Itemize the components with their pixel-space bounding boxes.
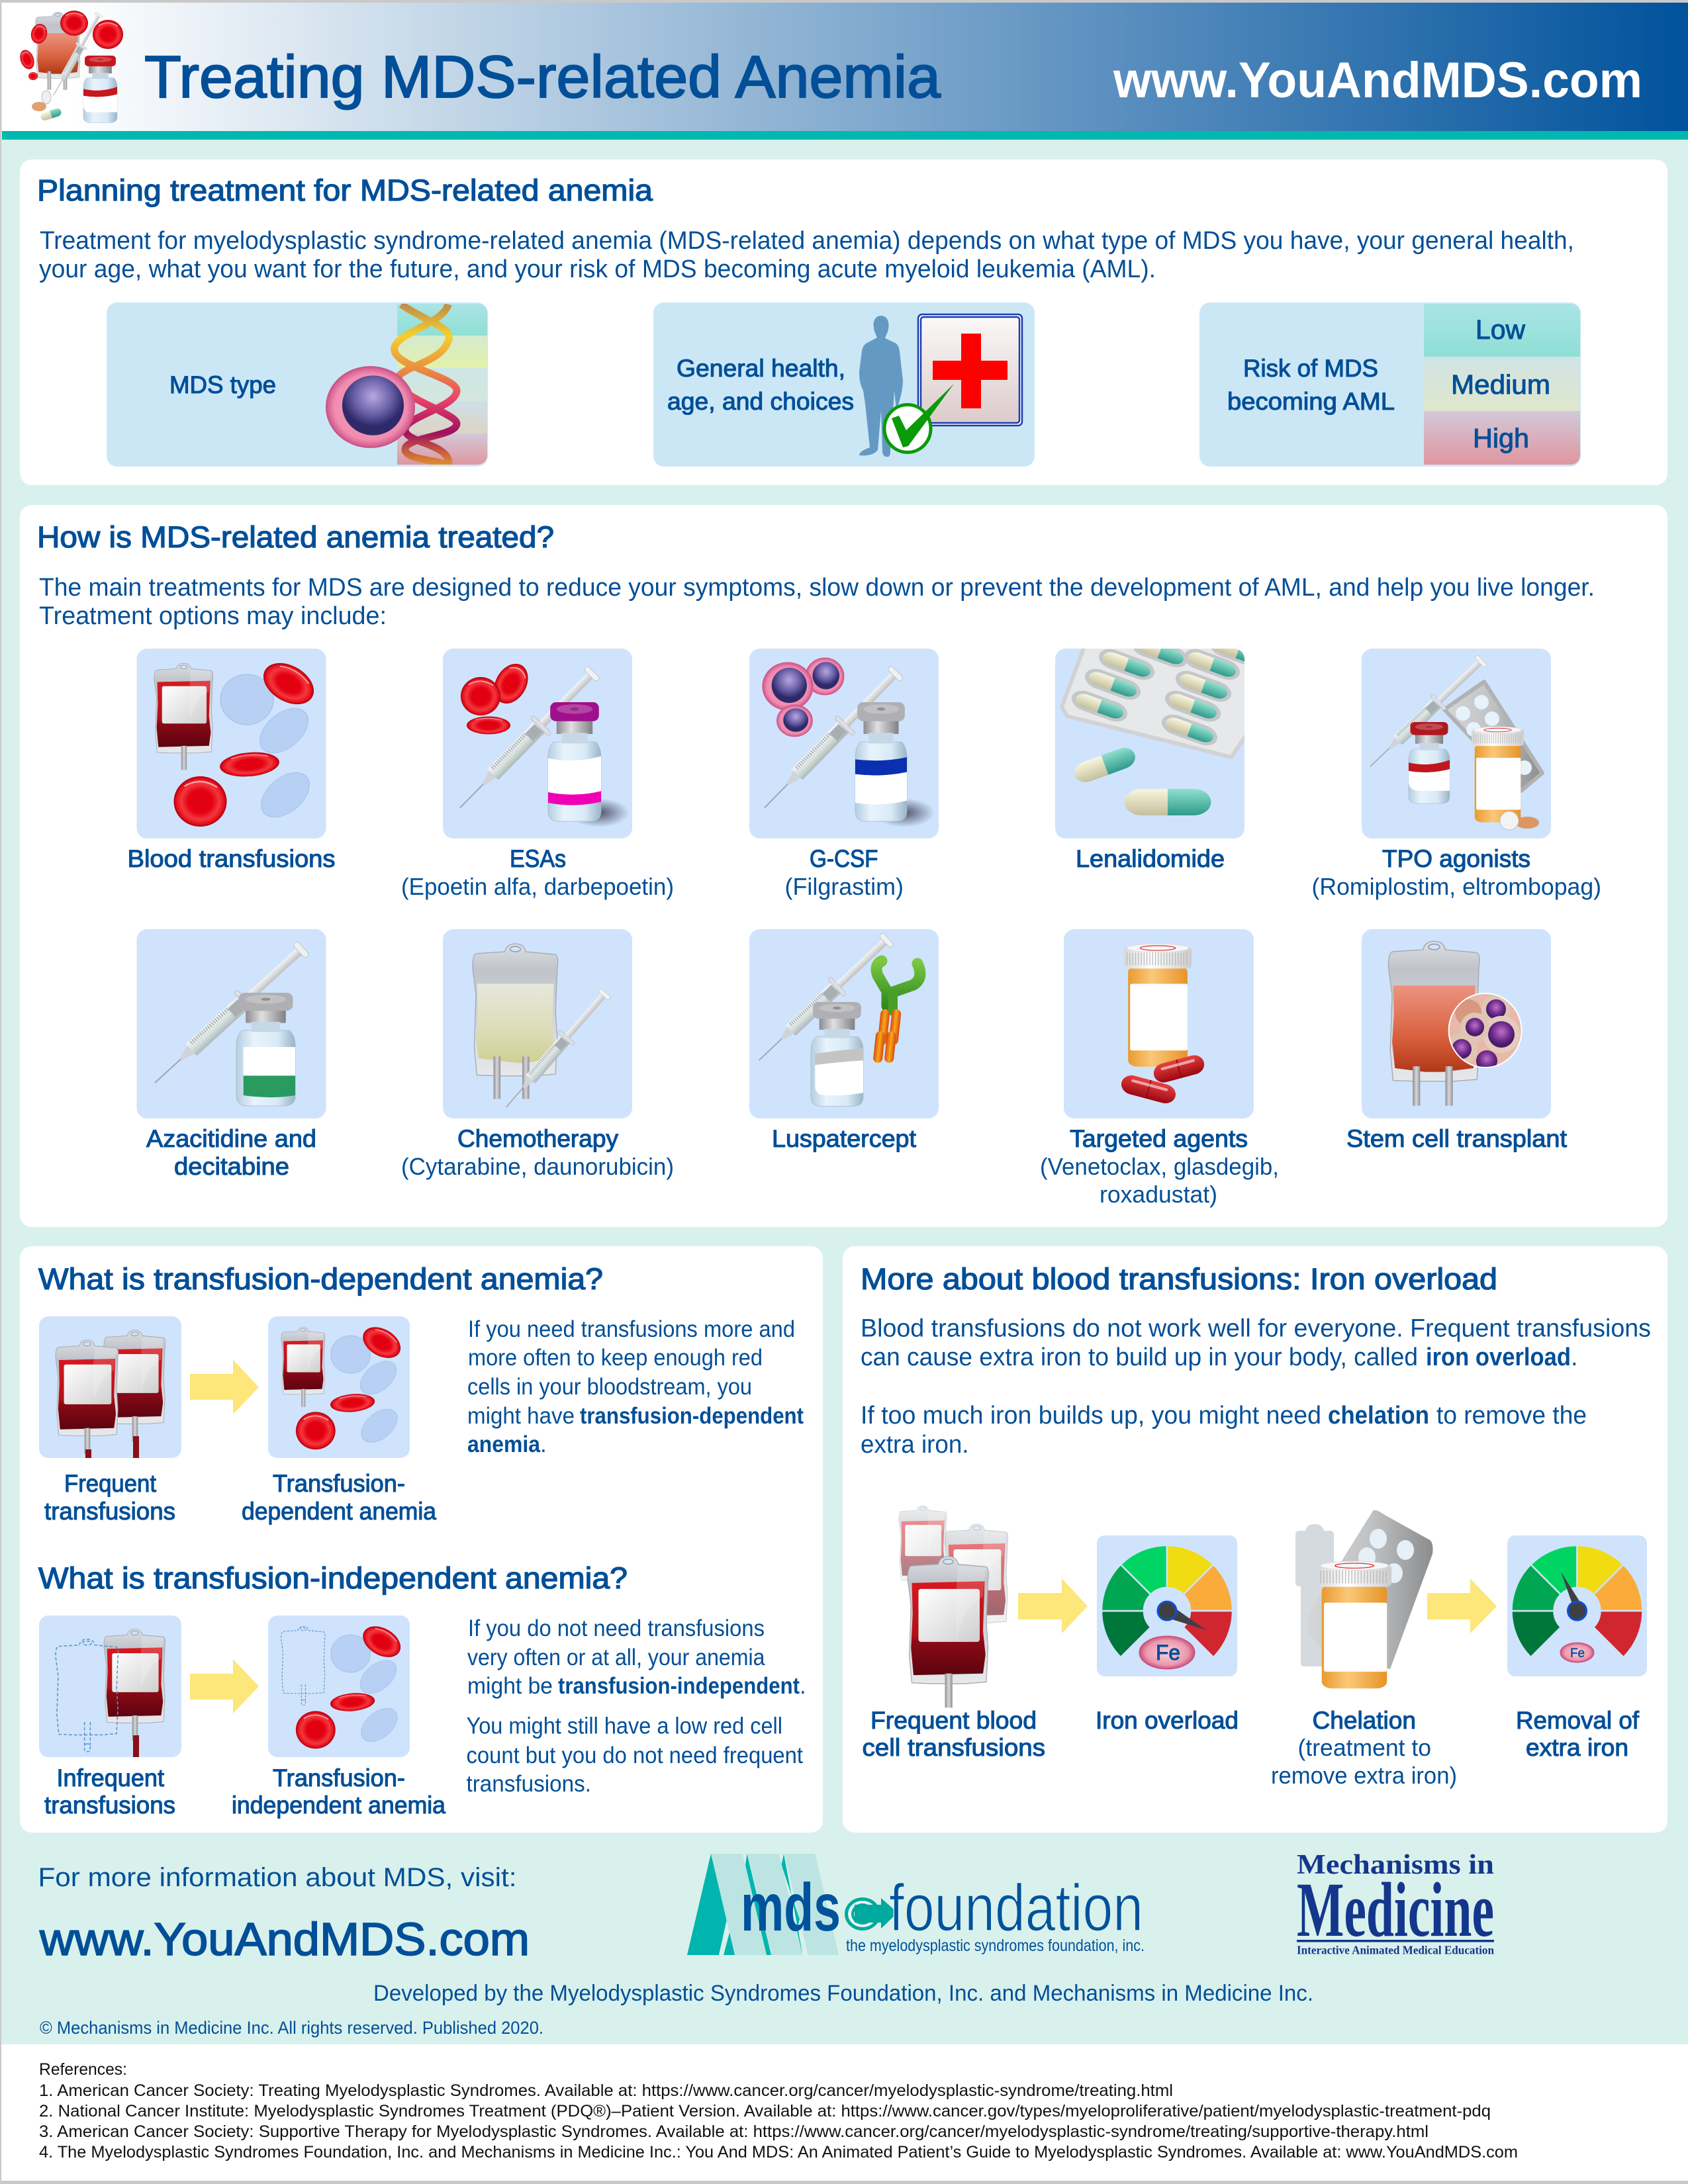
references: 4. The Myelodysplastic Syndromes Foundation, Inc. and Mechanisms in Medicine Inc.: You And MDS: An Animated Patient’s Guide to Myelodysplastic Syndromes. Available at: www.YouAndMDS.com [39,2143,1518,2161]
treatment: luspatercept [749,929,939,1152]
step: chelation: (treatment to [1297,1734,1431,1761]
treatment: azacitidine and decitabine [136,929,326,1180]
logo: Mechanisms in Medicine: Interactive Animated Medical Education [1297,1943,1494,1956]
text: transfusion-dependent explanation: If you need transfusions more and [468,1316,795,1342]
text: iron overload explanation: . [1571,1343,1578,1371]
label: Risk of MDS [1243,355,1378,382]
step: iron overload gauge: Iron overload [1096,1707,1239,1734]
panel: planning treatment [20,159,1667,485]
treatment: targeted agents: roxadustat) [1100,1181,1217,1208]
intro text [39,227,1574,283]
text: transfusion-independent explanation: count but you do not need frequent [466,1743,803,1768]
arrow [1427,1578,1497,1633]
website URL: www.YouAndMDS.com [1113,52,1642,109]
icon: medical cross sign [918,314,1022,426]
heading: transfusion-dependent: What is transfusion-dependent anemia? [38,1262,603,1296]
references: 2. National Cancer Institute: Myelodysplastic Syndromes Treatment (PDQ®)–Patient Version. Available at: https://www.cancer.gov/types/myeloproliferative/patient/myelodysplastic-treatment-pdq [39,2102,1491,2120]
box: MDS type [107,302,488,467]
text: transfusion-independent explanation: You might still have a low red cell [466,1713,782,1739]
icon: header treatment collage [17,11,123,122]
header banner [0,0,1688,140]
panel: how is anemia treated [20,505,1667,1227]
step: removal of extra iron gauge: extra iron [1526,1734,1628,1761]
text: iron overload explanation [861,1314,1651,1459]
step: frequent blood cell transfusions [862,1506,1045,1761]
text: iron overload explanation: chelation [1328,1402,1429,1430]
panel: iron overload [843,1246,1667,1833]
text: transfusion-independent explanation: might be [467,1673,553,1699]
text: transfusion-independent explanation [466,1615,806,1797]
footer: copyright: © Mechanisms in Medicine Inc. All rights reserved. Published 2020. [40,2018,543,2038]
heading: How is MDS-related anemia treated? [37,520,554,554]
text: transfusion-independent explanation: If you do not need transfusions [468,1615,765,1641]
intro text: Treatment for myelodysplastic syndrome-related anemia (MDS-related anemia) depends on what type of MDS you have, your general health, [40,227,1574,255]
treatment: chemotherapy: (Cytarabine, daunorubicin) [401,1153,674,1180]
text: transfusion-independent explanation: transfusions. [466,1771,591,1797]
treatment: stem cell transplant: Stem cell transplant [1346,1125,1568,1152]
logo: MDS Foundation: mds [741,1870,841,1945]
card: transfusion-independent anemia: independent anemia [232,1792,445,1819]
text: transfusion-dependent explanation: more often to keep enough red [468,1345,763,1371]
heading: More about blood transfusions: Iron overload [861,1262,1497,1296]
logo: MDS Foundation: the myelodysplastic syndromes foundation, inc. [846,1936,1145,1955]
references: 1. American Cancer Society: Treating Myelodysplastic Syndromes. Available at: https://www.cancer.org/cancer/myelodysplastic-syndrome/treating.html [39,2081,1173,2100]
step: chelation [1271,1510,1457,1789]
logo: Mechanisms in Medicine [1297,1850,1494,1956]
treatment: ESAs: (Epoetin alfa, darbepoetin) [401,873,674,900]
intro text [39,574,1595,630]
intro text: The main treatments for MDS are designed to reduce your symptoms, slow down or prevent the development of AML, and help you live longer. [39,574,1595,602]
step: chelation: remove extra iron) [1271,1762,1457,1789]
card: transfusion-dependent anemia: Transfusion- [273,1470,405,1497]
logo: Mechanisms in Medicine: Medicine [1297,1866,1494,1953]
risk level: medium: Medium [1451,369,1550,400]
treatment: TPO agonists: (Romiplostim, eltrombopag) [1312,873,1601,900]
treatment: G-CSF [749,649,939,900]
treatment: G-CSF: (Filgrastim) [785,873,904,900]
box: risk of AML [1199,302,1581,467]
treatment: stem cell transplant [1346,929,1568,1152]
card: frequent transfusions: Frequent [64,1470,157,1497]
box: general health [653,302,1035,467]
text: transfusion-dependent explanation: transfusion-dependent [580,1403,804,1429]
label: becoming AML [1227,388,1395,415]
text: iron overload explanation: If too much iron builds up, you might need [861,1402,1321,1430]
logo: MDS Foundation [687,1854,1145,1955]
icon: stem cell inset [1446,993,1522,1071]
treatment: luspatercept: Luspatercept [772,1125,917,1152]
intro text: Treatment options may include: [39,602,387,630]
treatment: ESAs: ESAs [510,845,566,872]
intro text: your age, what you want for the future, and your risk of MDS becoming acute myeloid leukemia (AML). [39,255,1156,283]
references: 3. American Cancer Society: Supportive Therapy for Myelodysplastic Syndromes. Available at: https://www.cancer.org/cancer/myelodysplastic-syndrome/treating/supportive-therapy.html [39,2122,1429,2141]
treatment: lenalidomide [1055,649,1244,868]
card: infrequent transfusions [39,1615,181,1819]
references: References: [39,2060,127,2079]
treatment: ESAs [401,649,674,900]
arrow [190,1659,259,1713]
text: transfusion-independent explanation: very often or at all, your anemia [467,1645,765,1670]
risk level: medium [1424,357,1580,411]
treatment: chemotherapy [401,929,674,1180]
icon: abnormal blood cell [326,367,414,447]
treatment: chemotherapy: Chemotherapy [457,1125,618,1152]
treatment: azacitidine and decitabine: Azacitidine and [146,1125,316,1152]
icon: person silhouette [859,316,903,457]
text: transfusion-dependent explanation: anemia [467,1432,540,1457]
text: iron overload explanation: extra iron. [861,1431,969,1459]
footer: more information: www.YouAndMDS.com [39,1913,530,1965]
icon: DNA helix [395,304,457,465]
text: iron overload explanation: iron overload [1426,1343,1571,1371]
treatment: targeted agents [1040,929,1279,1208]
card: transfusion-independent anemia [232,1615,445,1819]
footer: more information: For more information about MDS, visit: [38,1863,516,1892]
text: iron overload explanation: to remove the [1436,1402,1587,1430]
treatment: azacitidine and decitabine: decitabine [174,1153,289,1180]
text: transfusion-dependent explanation [467,1316,804,1457]
text: iron overload explanation: Blood transfusions do not work well for everyone. Frequent transfusions [861,1314,1651,1342]
step: removal of extra iron gauge: Removal of [1516,1707,1640,1734]
risk level: high [1424,411,1580,465]
logo: Mechanisms in Medicine: Mechanisms in [1297,1850,1494,1880]
treatment: TPO agonists: TPO agonists [1382,845,1530,872]
heading: Planning treatment for MDS-related anemia [37,173,653,207]
step: removal of extra iron gauge [1507,1535,1647,1761]
text: transfusion-dependent explanation: . [540,1432,547,1457]
card: transfusion-dependent anemia [242,1316,436,1525]
treatment: blood transfusions: Blood transfusions [127,845,335,872]
footer: developer credit: Developed by the Myelodysplastic Syndromes Foundation, Inc. and Mechanisms in Medicine Inc. [373,1981,1313,2006]
step: iron overload gauge [1096,1535,1239,1734]
label [1227,355,1395,415]
card: frequent transfusions [39,1316,181,1525]
treatment: lenalidomide: Lenalidomide [1076,845,1225,872]
treatment: targeted agents: (Venetoclax, glasdegib, [1040,1153,1279,1180]
risk levels [1424,304,1580,465]
label: MDS type [169,371,276,398]
icon: antibody [873,961,920,1064]
label [667,355,854,415]
panel: transfusion dependent and independent [20,1246,823,1833]
arrow [1018,1578,1088,1633]
step: frequent blood cell transfusions: Frequent blood [870,1707,1037,1734]
risk level: low: Low [1476,314,1525,345]
page edge [0,0,1,2184]
icon: check mark [884,384,954,453]
treatment: G-CSF: G-CSF [810,845,878,872]
text: transfusion-independent explanation: transfusion-independent [558,1673,800,1699]
arrow [190,1359,259,1414]
label: General health, [677,355,845,382]
step: iron overload gauge: Fe [1156,1641,1180,1664]
card: transfusion-dependent anemia: dependent anemia [242,1498,436,1525]
card: infrequent transfusions: transfusions [44,1792,175,1819]
footer: more information [38,1863,530,1965]
text: transfusion-dependent explanation: cells in your bloodstream, you [467,1374,752,1400]
logo: MDS Foundation: foundation [889,1871,1143,1945]
risk level: low [1424,304,1580,357]
text: transfusion-independent explanation: . [800,1673,806,1699]
step: removal of extra iron gauge: Fe [1570,1647,1585,1661]
title: Treating MDS-related Anemia [144,44,941,111]
step: frequent blood cell transfusions: cell transfusions [862,1734,1045,1761]
card: infrequent transfusions: Infrequent [57,1764,165,1792]
step: chelation: Chelation [1312,1707,1416,1734]
text: iron overload explanation: can cause extra iron to build up in your body, called [861,1343,1418,1371]
card: transfusion-independent anemia: Transfusion- [273,1764,405,1792]
references [0,2044,1688,2184]
risk level: high: High [1473,423,1529,453]
text: transfusion-dependent explanation: might have [467,1403,575,1429]
treatment: TPO agonists [1312,649,1601,900]
treatment: targeted agents: Targeted agents [1070,1125,1248,1152]
heading: transfusion-independent: What is transfusion-independent anemia? [38,1561,628,1595]
card: frequent transfusions: transfusions [44,1498,175,1525]
label: age, and choices [667,388,854,415]
treatment: blood transfusions [127,649,335,872]
